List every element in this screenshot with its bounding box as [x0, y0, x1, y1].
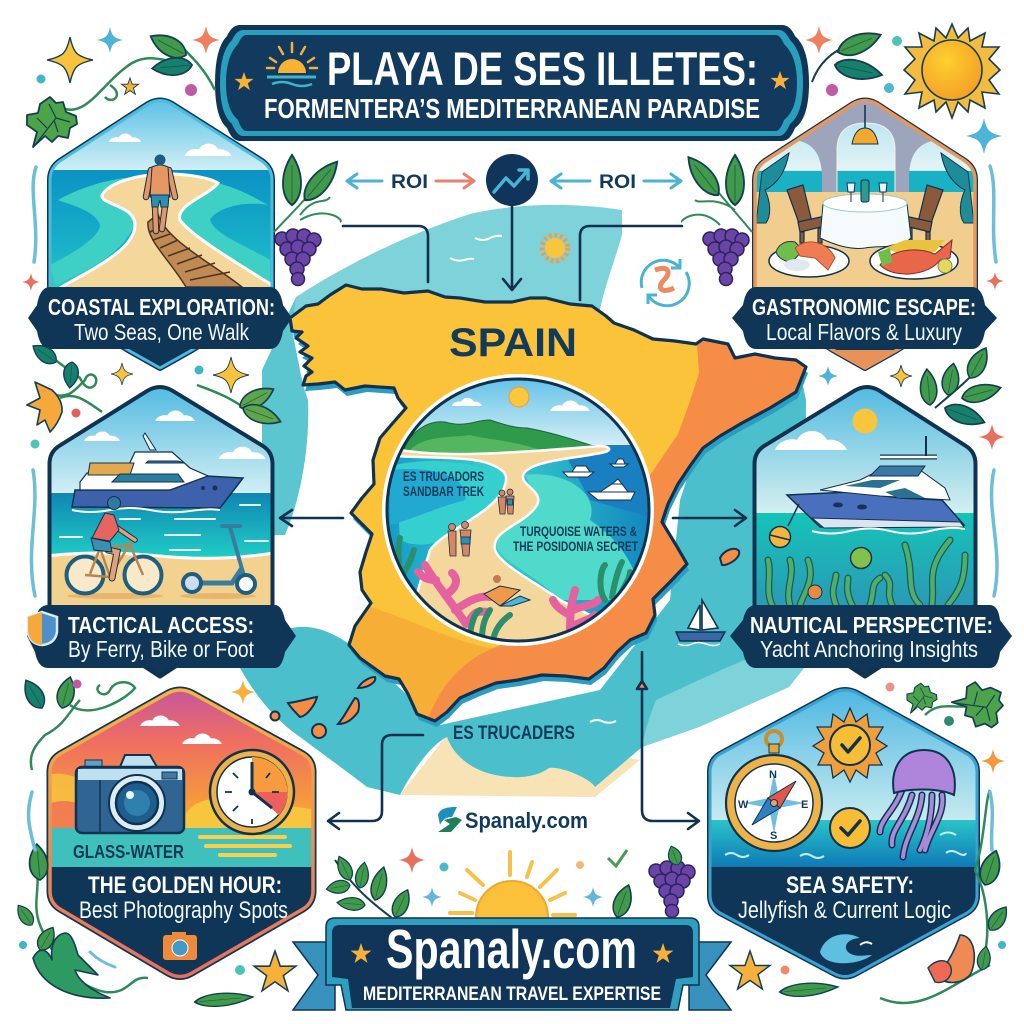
connector arrows — [280, 206, 746, 829]
icon: title stars — [234, 71, 790, 90]
label: The Golden Hour — [79, 872, 288, 924]
yachts — [563, 459, 635, 500]
people on the sandbar — [448, 489, 514, 556]
decoration: grape branch right — [681, 152, 752, 286]
label: Sea Safety — [738, 872, 951, 924]
label: Tactical Access: TACTICAL ACCESS: — [68, 612, 254, 638]
icon: shield — [28, 612, 57, 645]
connector: ROI arrows and chart badge: ROI — [391, 172, 428, 193]
chairs — [787, 185, 943, 243]
decoration: top-left vine and stars — [22, 26, 220, 291]
card: Sea Safety — [705, 685, 985, 987]
figure: cyclist — [91, 496, 135, 578]
icon: sunrise over water — [267, 43, 317, 86]
icon: camera — [163, 932, 197, 960]
label: Coastal Exploration — [28, 287, 292, 349]
card: Sea Safety: S — [770, 830, 777, 842]
illustration: central sandbar circle: SANDBAR TREK — [403, 484, 484, 499]
label: Nautical Perspective — [730, 605, 1012, 668]
label: Nautical Perspective: Yacht Anchoring Insights — [760, 636, 978, 662]
figure: walker — [146, 154, 175, 231]
connector: ROI arrows and chart badge — [347, 154, 681, 206]
card: Sea Safety: E — [801, 799, 808, 811]
logo: Spanaly.com: Spanaly.com — [465, 808, 588, 833]
label: Coastal Exploration: COASTAL EXPLORATION: — [48, 294, 275, 320]
decoration: lower-right vines and star — [730, 674, 1014, 1003]
label: Tactical Access: By Ferry, Bike or Foot — [68, 636, 255, 662]
illustration: central sandbar circle: TURQUOISE WATERS & — [520, 524, 637, 539]
title line 2: FORMENTERA’S MEDITERRANEAN PARADISE — [264, 93, 760, 124]
decoration: footer laurel and grapes — [325, 844, 695, 920]
map: Spain — [290, 285, 820, 730]
card: Nautical Perspective — [730, 380, 1012, 676]
card: Sea Safety: N — [769, 769, 777, 781]
card: Coastal Exploration — [28, 95, 292, 368]
label: Sea Safety: Jellyfish & Current Logic — [738, 897, 951, 924]
illustration: central sandbar circle: THE POSIDONIA SECRET — [513, 539, 639, 554]
label: Coastal Exploration: Two Seas, One Walk — [74, 319, 249, 345]
icon: footer stars — [351, 943, 673, 963]
map label: SPAIN: SPAIN — [449, 321, 577, 365]
footer sun — [450, 852, 575, 953]
icon: sun — [904, 24, 1000, 118]
title line 1: PLAYA DE SES ILLETES: — [327, 42, 758, 95]
footer tagline: MEDITERRANEAN TRAVEL EXPERTISE — [363, 984, 661, 1005]
illustration: central sandbar circle — [380, 374, 660, 660]
label: Sea Safety: SEA SAFETY: — [786, 872, 914, 899]
title banner — [215, 25, 809, 141]
decoration: grape branch left — [274, 155, 344, 286]
label: Tactical Access — [27, 605, 296, 668]
icon: wave — [820, 934, 872, 963]
connector: ROI arrows and chart badge: ROI — [599, 172, 636, 193]
map: sea and sand background — [240, 205, 806, 797]
text: Glass-Water: GLASS-WATER — [73, 842, 184, 862]
decoration: top-right vine, sun and stars — [805, 24, 1004, 290]
card: The Golden Hour — [45, 685, 320, 987]
card: Sea Safety: W — [738, 799, 749, 811]
icon: sun over the sea — [542, 235, 568, 261]
sailboat — [676, 600, 725, 646]
label: Gastronomic Escape: Local Flavors & Luxury — [766, 319, 962, 345]
label: The Golden Hour: THE GOLDEN HOUR: — [88, 872, 282, 899]
decoration: lower-left vines and star — [13, 675, 296, 1008]
footer banner — [293, 918, 731, 1010]
card: Tactical Access — [27, 380, 296, 676]
icon: exchange cycle — [641, 259, 689, 306]
footer brand: Spanaly.com — [386, 918, 637, 980]
islands: Canaries and Balearics — [270, 549, 739, 738]
decoration: mid-right foliage — [231, 344, 1005, 704]
card: Gastronomic Escape — [732, 95, 997, 368]
label: Gastronomic Escape — [732, 287, 997, 349]
illustration: central sandbar circle: ES TRUCADORS — [403, 469, 484, 484]
decoration: mid-left foliage — [27, 340, 283, 596]
label: The Golden Hour: Best Photography Spots — [79, 897, 288, 924]
map label: ES TRUCADERS: ES TRUCADERS — [453, 723, 575, 744]
